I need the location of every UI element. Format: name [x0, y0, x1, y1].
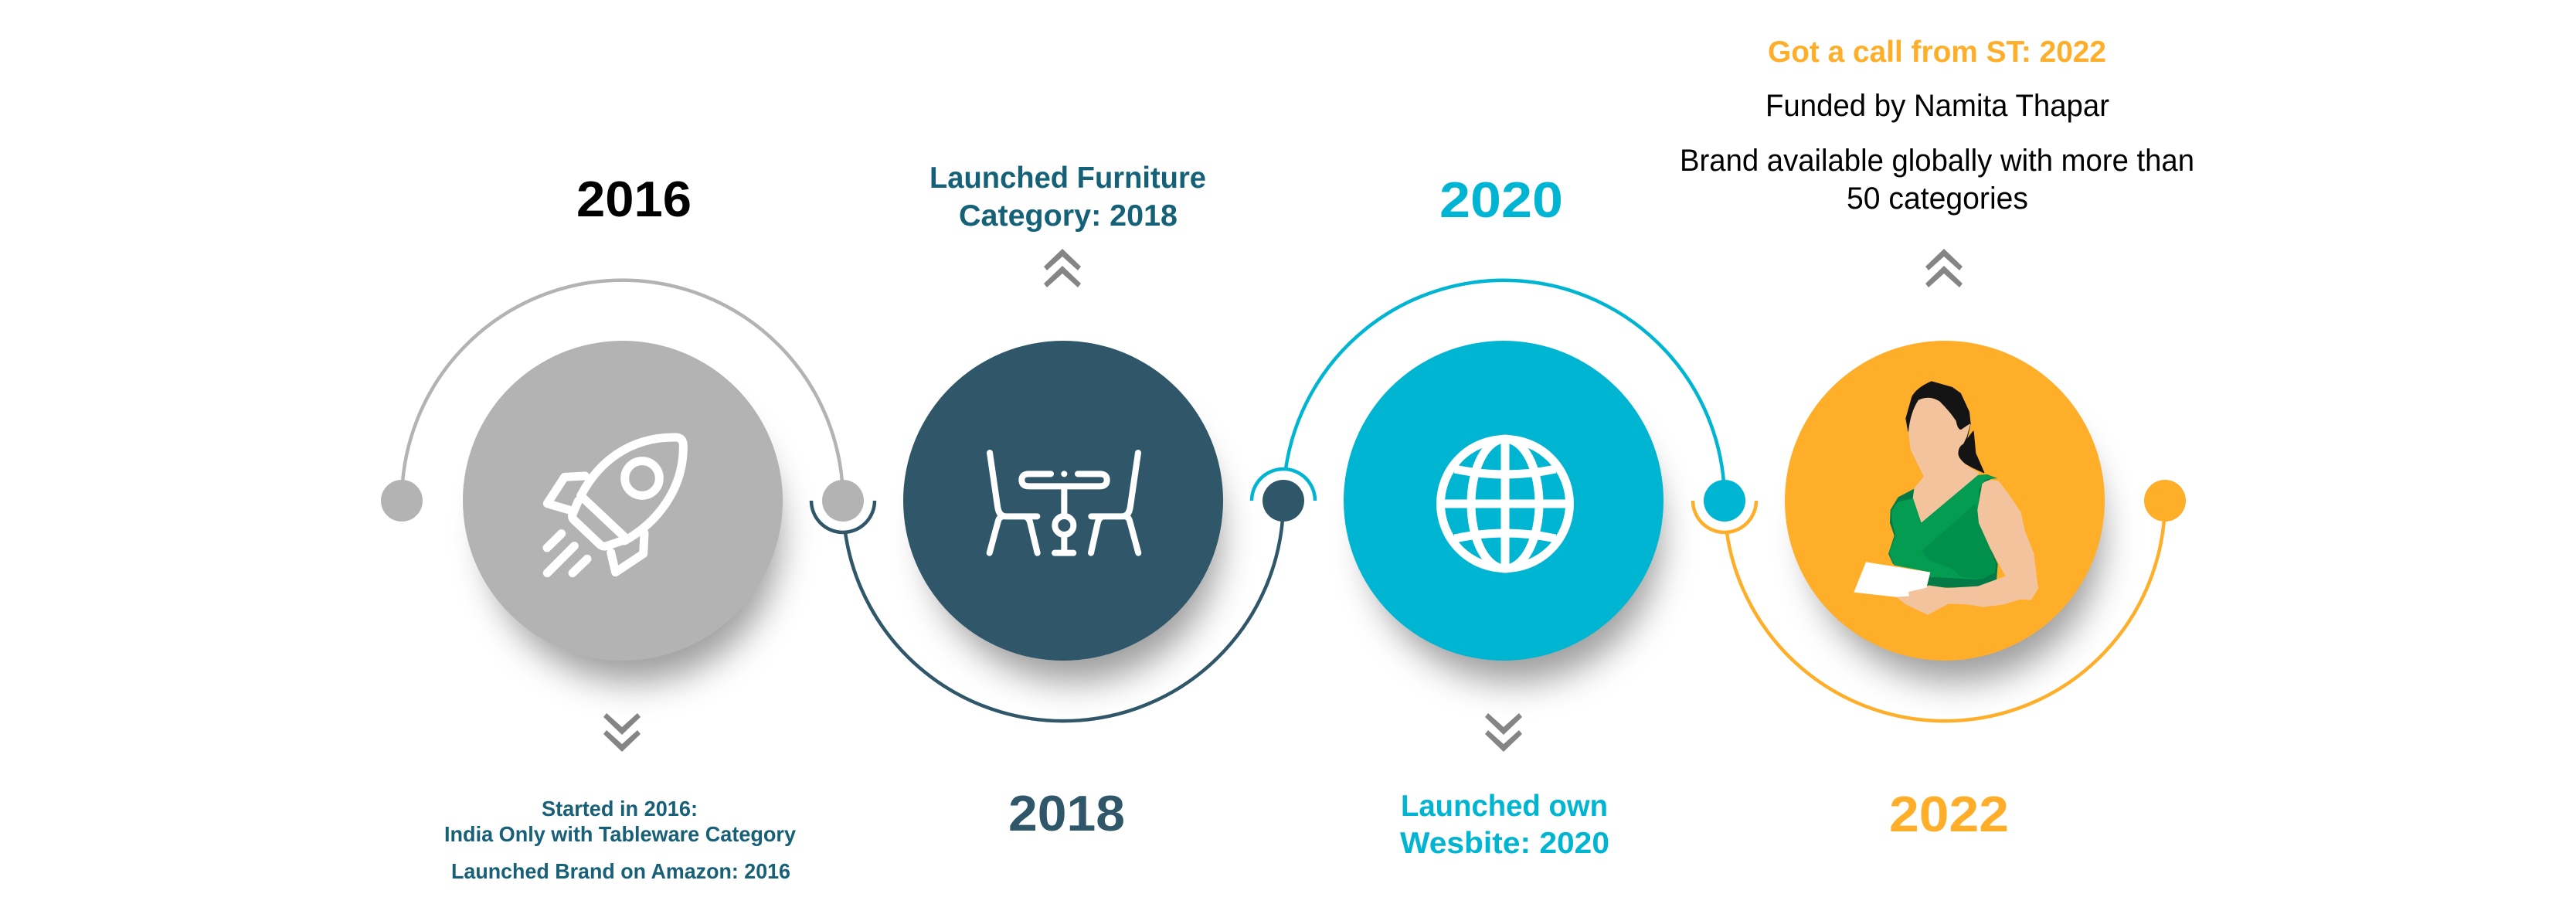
text block: 2022 milestones — [1680, 36, 2194, 216]
text block: 2016 milestones — [444, 797, 796, 883]
arc: 2022 — [1727, 501, 2165, 721]
icon: rocket — [547, 437, 683, 573]
timeline dot teal — [1704, 480, 1745, 522]
text block: 2022 milestones: Brand available globally with more than — [1680, 144, 2194, 178]
timeline dot grey — [822, 480, 864, 522]
arc: 2016 — [402, 280, 843, 501]
timeline dot orange — [2144, 480, 2186, 522]
step 2016 circle with rocket — [463, 341, 783, 682]
text block: 2018 milestone: Launched Furniture — [929, 161, 1206, 195]
icon: woman holding paper — [1854, 382, 2037, 614]
text block: 2022 milestones: Funded by Namita Thapar — [1765, 89, 2109, 123]
arc: 2018 — [845, 501, 1283, 721]
arrows up above 2022 — [1925, 249, 1963, 287]
text block: 2020 milestone: Launched own — [1401, 790, 1608, 823]
cup over 2018 joint — [1252, 469, 1315, 501]
text block: 2020 milestone: Wesbite: 2020 — [1400, 827, 1609, 860]
arrows down under 2020 — [1485, 713, 1522, 752]
cup under 2016 joint — [811, 501, 875, 532]
arrows down under 2016 — [603, 713, 641, 752]
step 2022 circle with founder illustration — [1785, 341, 2105, 682]
text block: 2016 milestones: Started in 2016: — [542, 797, 698, 821]
arc: 2020 — [1286, 280, 1725, 501]
timeline dot grey start — [381, 480, 423, 522]
text block: 2022 milestones: Got a call from ST: 2022 — [1768, 36, 2106, 69]
arrows up above 2018 — [1044, 249, 1081, 287]
text block: 2020 milestone — [1400, 790, 1609, 860]
year 2020: 2020 — [1439, 172, 1563, 228]
icon: globe — [1440, 439, 1570, 569]
cup under 2020 joint — [1693, 501, 1756, 532]
text block: 2018 milestone — [929, 161, 1206, 233]
year 2018: 2018 — [1008, 785, 1125, 841]
year 2016: 2016 — [576, 171, 692, 227]
text block: 2016 milestones: India Only with Tableware Category — [444, 822, 796, 846]
text block: 2022 milestones: 50 categories — [1847, 182, 2028, 216]
text block: 2016 milestones: Launched Brand on Amazon: 2016 — [451, 859, 790, 883]
year 2022: 2022 — [1889, 786, 2009, 842]
step 2018 circle with furniture — [903, 341, 1223, 682]
text block: 2018 milestone: Category: 2018 — [959, 199, 1178, 233]
timeline dot navy — [1263, 480, 1304, 522]
step 2020 circle with globe — [1344, 341, 1664, 682]
icon: table and chairs — [990, 453, 1138, 553]
